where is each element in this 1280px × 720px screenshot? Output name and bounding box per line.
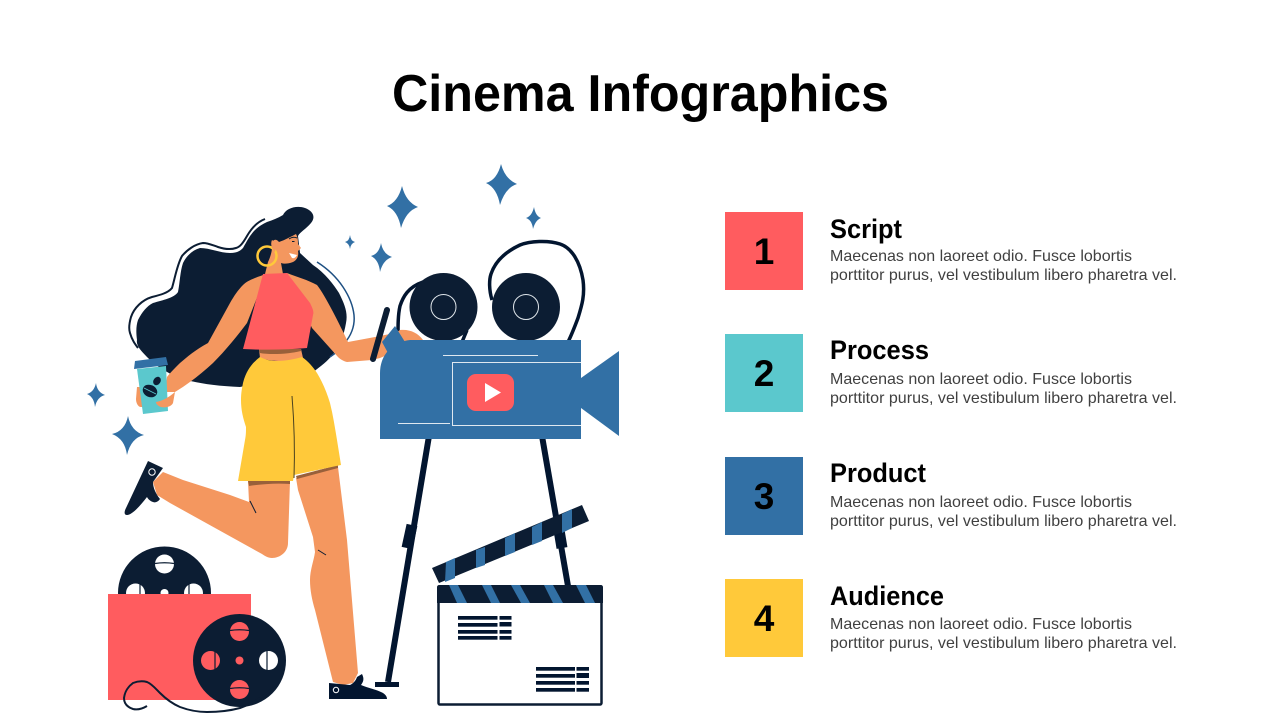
coral block	[108, 594, 251, 700]
figure: woman	[125, 234, 423, 699]
item 3: Product	[725, 457, 1177, 535]
illustration: cinema scene	[87, 164, 619, 712]
number tile 4	[725, 579, 803, 657]
item 4: Audience	[725, 579, 1177, 657]
hand on cup	[156, 392, 175, 407]
icon: film spools on camera	[398, 241, 584, 342]
number 3: 3	[754, 476, 774, 517]
back arm fingers	[136, 387, 143, 407]
icon: raised shoe	[125, 461, 163, 515]
number 4: 4	[754, 598, 775, 639]
icon: front film reel	[124, 614, 286, 712]
number tile 1	[725, 212, 803, 290]
top	[243, 273, 313, 350]
heading: Process: Process	[830, 335, 929, 365]
body text 3: Maecenas non laoreet odio. Fusce lobortis	[830, 494, 1132, 511]
heading: Product: Product	[830, 458, 926, 488]
number 2: 2	[754, 353, 774, 394]
body text 4: porttitor purus, vel vestibulum libero pharetra vel.	[830, 635, 1177, 652]
right arm and shoulder	[287, 273, 423, 362]
body text 1: porttitor purus, vel vestibulum libero pharetra vel.	[830, 267, 1177, 284]
midriff	[259, 349, 303, 361]
title: Cinema Infographics	[392, 65, 889, 123]
left arm	[165, 275, 263, 392]
number tile 3	[725, 457, 803, 535]
icon: clapperboard	[432, 505, 603, 704]
number 1: 1	[754, 231, 774, 272]
body text 3: porttitor purus, vel vestibulum libero pharetra vel.	[830, 513, 1177, 530]
item 2: Process	[725, 334, 1177, 412]
icon: sparkles	[87, 164, 541, 455]
number tile 2	[725, 334, 803, 412]
icon: film camera	[373, 310, 619, 439]
icon: coffee cup	[134, 357, 168, 414]
icon: hoop earring	[258, 246, 276, 266]
icon: standing shoe	[329, 674, 387, 699]
body text 2: Maecenas non laoreet odio. Fusce lobortis	[830, 371, 1132, 388]
body text 4: Maecenas non laoreet odio. Fusce lobortis	[830, 616, 1132, 633]
icon: hair	[129, 207, 354, 387]
heading: Audience: Audience	[830, 581, 944, 611]
heading: Script: Script	[830, 214, 902, 244]
legs	[153, 472, 290, 558]
tripod	[375, 436, 568, 684]
body text 2: porttitor purus, vel vestibulum libero pharetra vel.	[830, 390, 1177, 407]
body text 1: Maecenas non laoreet odio. Fusce lobortis	[830, 248, 1132, 265]
skirt	[238, 357, 341, 481]
item 1: Script	[725, 212, 1177, 290]
neck and head	[265, 234, 301, 274]
icon: back film reel	[118, 546, 211, 640]
